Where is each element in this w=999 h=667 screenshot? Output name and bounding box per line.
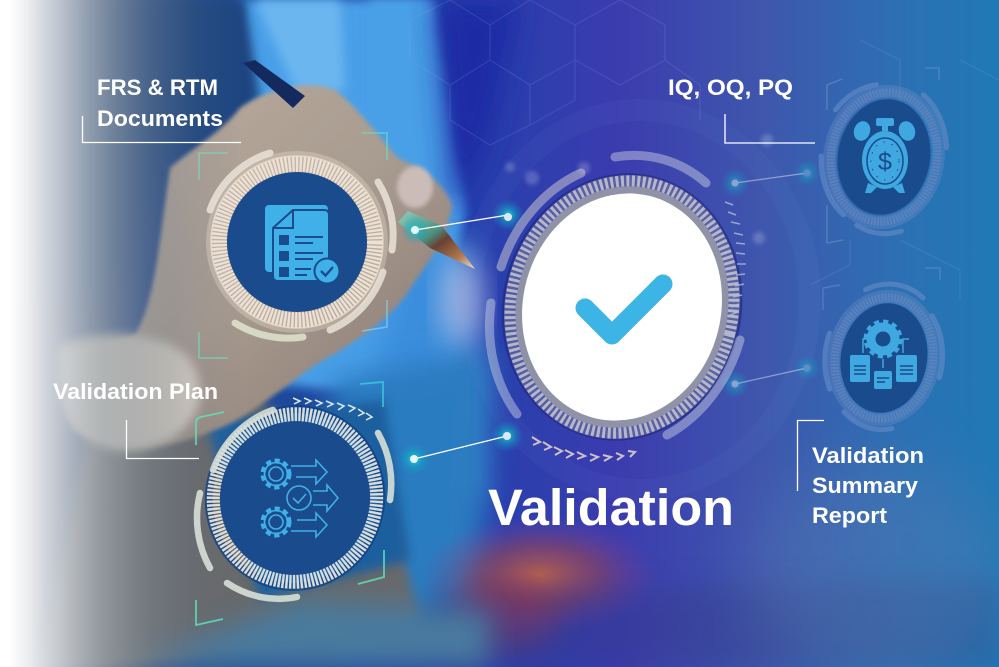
connector: validation to summary report [720, 355, 820, 399]
connector: plan to validation [398, 420, 523, 475]
icon panel: validation plan [189, 382, 401, 625]
main validation dial [475, 149, 769, 465]
outer arc segments [489, 155, 740, 435]
icon: check mark [585, 284, 663, 335]
icon: alarm clock with dollar [851, 118, 918, 193]
target corners [199, 133, 387, 358]
connector: validation to IQ OQ PQ [720, 160, 820, 198]
connector: documents to validation [401, 199, 524, 244]
icon panel: validation summary report [813, 268, 954, 439]
label: FRS and RTM Documents: FRS & RTM [97, 75, 218, 100]
label: Validation Plan [53, 379, 218, 458]
label: Validation Summary Report: Summary [812, 473, 919, 498]
title: Validation: Validation [488, 479, 734, 536]
pen [243, 60, 305, 108]
label: FRS and RTM Documents: Documents [97, 106, 223, 131]
label: IQ, OQ, PQ: IQ, OQ, PQ [668, 75, 793, 100]
label: IQ, OQ, PQ [668, 75, 815, 143]
icon: gear and documents [850, 322, 917, 389]
icon: gears with arrows [263, 460, 338, 537]
chevrons above plan [293, 398, 372, 420]
left hand shape [65, 85, 452, 447]
icon: alarm clock with dollar: $ [878, 148, 892, 176]
label: Validation Plan: Validation Plan [53, 379, 218, 404]
sparkle lights [505, 134, 773, 244]
icon panel: FRS and RTM documents [199, 133, 393, 358]
label: Validation Summary Report: Report [812, 503, 888, 528]
icon panel: IQ OQ PQ [810, 68, 955, 243]
hexagon pattern [410, 0, 999, 490]
icon: document checklist [265, 205, 340, 284]
label: Validation Summary Report: Validation [812, 443, 924, 468]
label: Validation Summary Report [798, 420, 924, 528]
chevrons under dial [532, 437, 635, 461]
label: FRS and RTM Documents [82, 75, 241, 142]
